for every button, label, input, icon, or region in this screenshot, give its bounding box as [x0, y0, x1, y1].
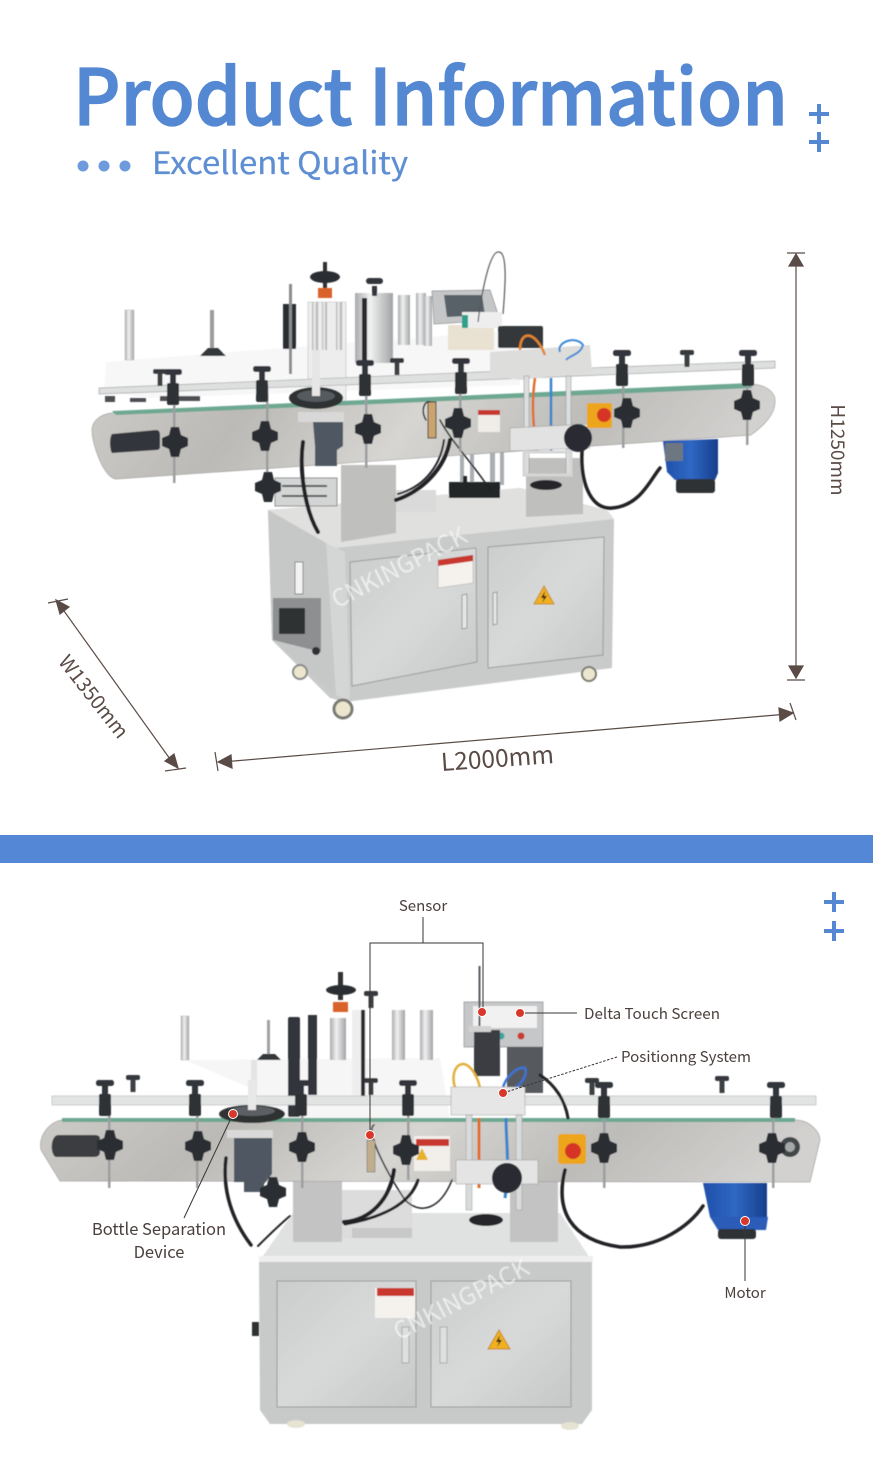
callout: positioning system: Positionng System [621, 1046, 751, 1067]
height arrow [787, 253, 805, 680]
label stations and screen [104, 252, 543, 402]
subtitle dots [78, 160, 130, 172]
machine photo: top, 3/4 view [92, 252, 775, 718]
motor [663, 439, 718, 493]
watermark: CNKINGPACK [324, 516, 473, 615]
dimension arrows [48, 253, 805, 771]
pulley [289, 350, 343, 409]
cabinet [268, 488, 614, 718]
callout: positioning system [498, 1046, 751, 1098]
callout: motor: Motor [724, 1282, 766, 1303]
green belt [112, 383, 752, 415]
emergency stop [558, 1134, 586, 1164]
servo unit [298, 412, 344, 466]
callout: bottle separation device: Bottle Separation [92, 1216, 226, 1240]
emergency stop [587, 403, 612, 428]
callout: sensor [366, 895, 486, 1140]
rail [99, 361, 775, 394]
machine photo: bottom, front view [41, 966, 820, 1430]
conveyor plate [92, 384, 775, 479]
title: Product Information [73, 37, 788, 148]
plus signs top [809, 104, 829, 152]
height label: H1250mm [825, 404, 852, 496]
upper label stations [181, 972, 450, 1122]
warning label [367, 1136, 450, 1172]
pillars [293, 1180, 558, 1242]
servo unit [227, 1130, 273, 1192]
rail [52, 1096, 816, 1105]
subtitle: Excellent Quality [152, 138, 408, 183]
cabinet [252, 1213, 593, 1430]
length arrow [215, 703, 796, 771]
cables [302, 402, 660, 532]
green belt [62, 1118, 795, 1122]
bracket assembly [451, 1087, 538, 1210]
conveyor plate [41, 1120, 820, 1182]
callout: bottle separation device [92, 1110, 238, 1263]
warning labels [438, 555, 554, 604]
callout: bottle separation device: Device [134, 1239, 184, 1263]
width arrow [48, 599, 186, 771]
end plates [52, 1135, 800, 1157]
pillars [275, 445, 583, 542]
watermark: CNKINGPACK [386, 1248, 535, 1347]
posts and knobs [153, 350, 760, 502]
callout: motor [724, 1216, 766, 1303]
motor [703, 1183, 768, 1239]
touch screen assembly [454, 966, 543, 1093]
bracket assembly [490, 336, 592, 490]
blue divider band [0, 835, 873, 863]
pulley [219, 1080, 285, 1123]
plus signs lower [824, 892, 844, 941]
length label: L2000mm [440, 736, 555, 779]
callout: delta touch screen [516, 1003, 720, 1024]
width label: W1350mm [53, 648, 137, 744]
posts and knobs [96, 1075, 785, 1207]
end plate [110, 430, 160, 453]
callout: delta touch screen: Delta Touch Screen [584, 1003, 720, 1024]
cables [225, 1075, 703, 1247]
callout: sensor: Sensor [399, 895, 447, 916]
